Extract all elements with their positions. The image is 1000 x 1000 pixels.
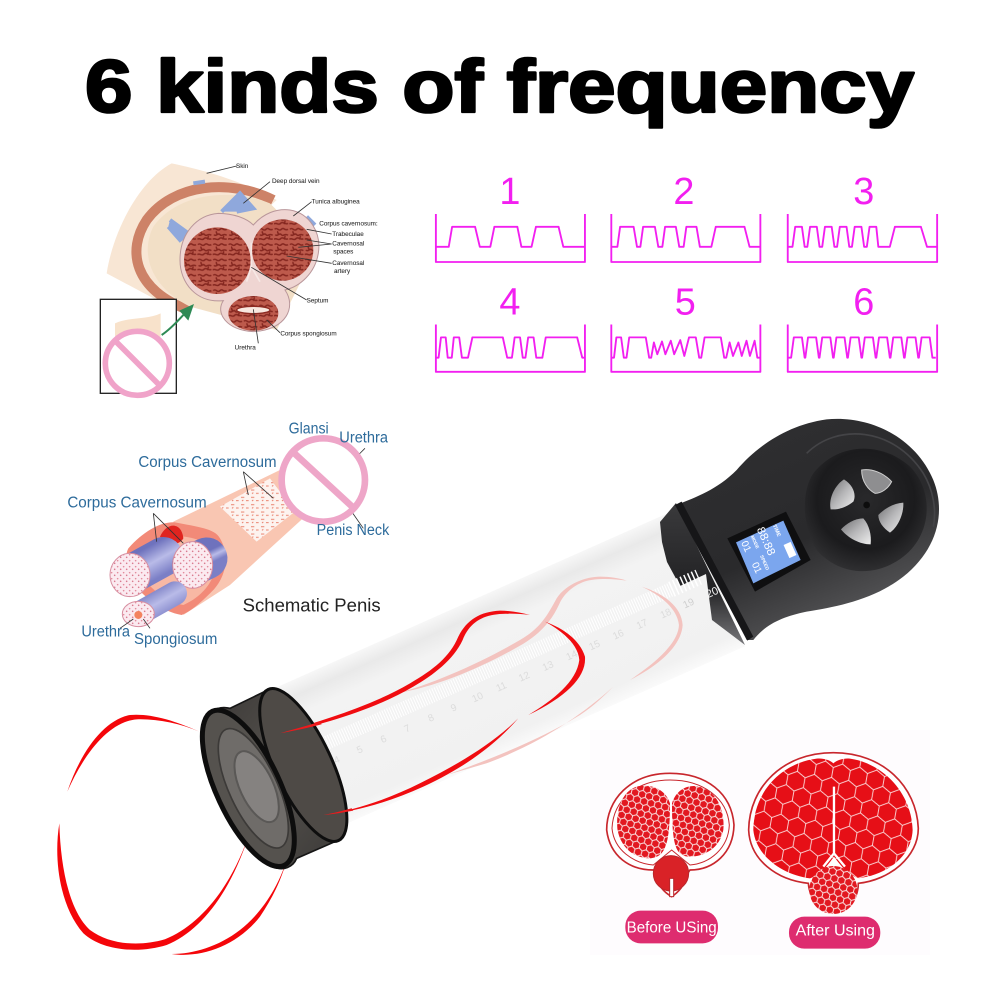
waveform 2 [611, 171, 760, 262]
after cross-section [749, 753, 918, 914]
ruler numbers: 10 [471, 690, 486, 705]
anatomy labels: Cavernosal [332, 260, 364, 267]
waveform 1: 1 [499, 171, 520, 213]
ruler ticks [275, 577, 699, 766]
lower chamber [228, 296, 278, 331]
red vessel [160, 526, 183, 544]
inner dark block [660, 503, 745, 645]
outer tissue [107, 163, 277, 310]
display: 01 [738, 539, 753, 554]
display bezel [727, 512, 811, 592]
blue labels: Urethra [339, 429, 388, 446]
display: TIME [771, 524, 782, 538]
upper highlight [807, 434, 935, 527]
control head [675, 419, 939, 641]
waveform 6 [788, 281, 937, 372]
blue labels: Corpus Cavernosum [67, 495, 207, 512]
blue labels: Urethra [81, 624, 130, 641]
ruler numbers: 7 [403, 723, 413, 735]
button: left [830, 479, 855, 509]
septum [247, 243, 260, 282]
ruler numbers: 5 [355, 744, 365, 757]
button: bottom [841, 518, 871, 544]
dial [805, 449, 927, 571]
before cross-section [607, 773, 734, 897]
censor mark [282, 438, 365, 522]
waveform 3: 3 [853, 171, 874, 213]
anatomy labels: Skin [236, 163, 249, 170]
leader lines [120, 448, 365, 628]
red contour [280, 611, 585, 815]
display: 88:88 [754, 525, 777, 558]
button: right [878, 503, 903, 533]
ruler numbers: 17 [635, 617, 650, 632]
ruler numbers [332, 585, 720, 767]
ruler numbers: 18 [659, 607, 674, 621]
ruler numbers: 19 [682, 596, 697, 611]
shaft [173, 470, 307, 615]
pale contour [397, 577, 683, 775]
contour inside sleeve [280, 722, 353, 815]
censor mark [105, 331, 169, 395]
before label [625, 911, 718, 943]
inner core [137, 536, 216, 605]
ruler numbers: 12 [517, 670, 532, 684]
blue labels [67, 421, 390, 648]
before label: Before USing [627, 920, 717, 937]
display: 01 [749, 561, 764, 576]
ruler numbers: 14 [565, 649, 580, 663]
ruler numbers: 20 [704, 585, 720, 601]
neck ring [675, 502, 753, 641]
waveform 6: 6 [853, 281, 874, 323]
button centre [863, 502, 870, 508]
anatomy labels: Tunica albuginea [312, 199, 360, 206]
display: MODE [750, 535, 760, 549]
cutaway window [220, 478, 295, 542]
panel: before and after comparison [607, 753, 918, 949]
ruler numbers: 15 [587, 638, 602, 653]
anatomy labels: spaces [333, 249, 353, 256]
lower cylinder [122, 593, 175, 627]
display [736, 521, 801, 583]
display: SPEED [759, 554, 770, 571]
green arrow [162, 304, 194, 335]
inset box [100, 299, 176, 393]
waveform 4: 4 [499, 281, 520, 323]
left contour [57, 715, 289, 955]
anatomy labels [235, 163, 378, 351]
left chamber [184, 227, 251, 294]
leader lines [207, 166, 332, 343]
panel: schematic diagram [67, 421, 390, 648]
blue labels: Glansi [289, 421, 329, 438]
anatomy labels: Corpus cavernosum: [319, 221, 378, 228]
transparent cylinder [246, 507, 745, 841]
right chamber [252, 219, 313, 281]
panel: pump device [57, 419, 939, 955]
cut end [126, 522, 226, 615]
anatomy labels: Deep dorsal vein [272, 178, 320, 185]
blue labels: Corpus Cavernosum [138, 454, 277, 471]
waveform 5: 5 [675, 281, 696, 323]
blue labels: Penis Neck [317, 522, 390, 539]
ruler numbers: 9 [449, 702, 459, 715]
left cylinder [110, 553, 163, 597]
tunica layer [180, 210, 319, 332]
ruler numbers: 16 [611, 628, 626, 643]
waveform 3 [788, 171, 937, 262]
title: 6 kinds of frequency [85, 45, 914, 128]
ruler numbers: 11 [495, 680, 509, 694]
chart: six frequency waveforms [436, 171, 937, 372]
ruler numbers: 13 [541, 659, 556, 674]
anatomy labels: Trabeculae [332, 231, 364, 238]
ruler numbers: 8 [426, 712, 436, 725]
anatomy labels: Cavernosal [332, 241, 364, 248]
panel: cross-section anatomy diagram [100, 163, 378, 395]
button: top [862, 470, 892, 493]
waveform 4 [436, 281, 585, 372]
after label: After Using [796, 922, 875, 939]
anatomy labels: artery [334, 268, 351, 275]
blue labels: Spongiosum [134, 631, 217, 648]
inner tissue [148, 195, 317, 330]
after label [789, 917, 880, 949]
head body [677, 419, 939, 640]
waveform 5 [611, 281, 760, 372]
waveform 1 [436, 171, 585, 262]
anatomy labels: Urethra [235, 344, 256, 351]
right cylinder [173, 542, 213, 588]
anatomy labels: Corpus spongiosum [280, 331, 337, 338]
ruler numbers: 6 [379, 733, 389, 746]
end sleeve [184, 678, 364, 879]
diagram caption: Schematic Penis [243, 595, 381, 616]
waveform 2: 2 [673, 171, 695, 213]
blue vessels [168, 182, 315, 240]
anatomy labels: Septum [307, 298, 328, 305]
skin ring [136, 187, 273, 311]
ruler [275, 572, 720, 790]
ruler numbers: 4 [332, 754, 342, 767]
